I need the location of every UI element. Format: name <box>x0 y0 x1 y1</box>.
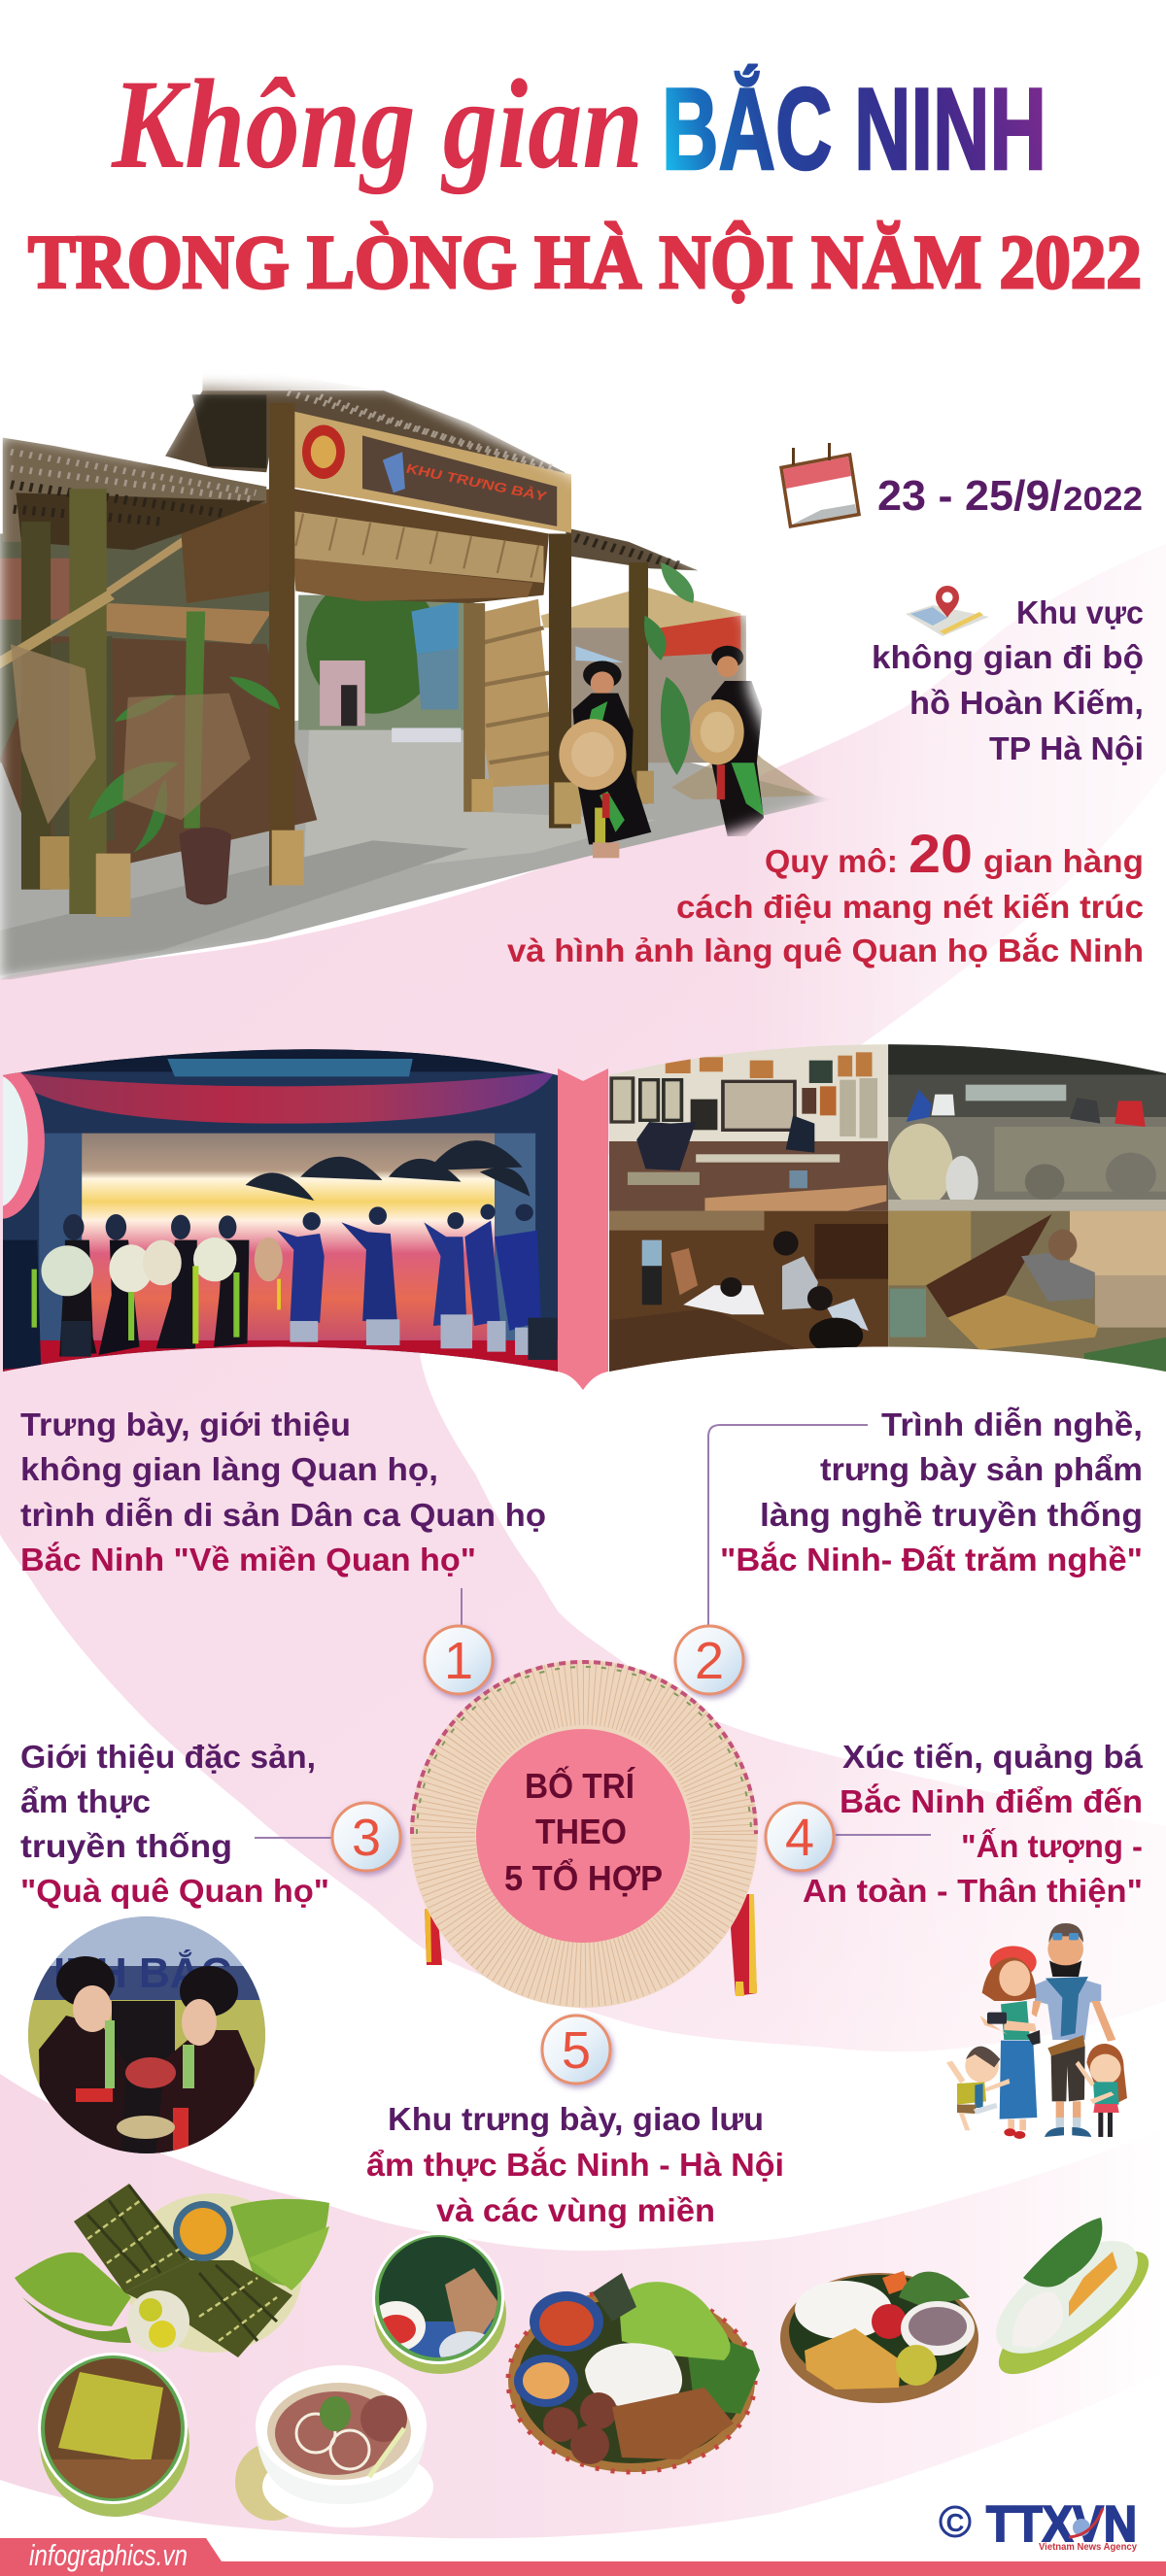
centre circle <box>476 1729 690 1943</box>
photo: quan ho stage performance <box>0 1039 558 1376</box>
mother <box>979 1946 1041 2139</box>
copyright mark: C <box>946 2508 965 2537</box>
text: item 3: "Quà quê Quan họ" <box>20 1873 329 1909</box>
mat weaving <box>888 1211 1166 1373</box>
number badge 4 <box>766 1803 834 1871</box>
title script line: Không gian <box>111 52 643 195</box>
footer bar <box>0 2538 1166 2576</box>
photo: craft villages collage <box>602 1039 1166 1373</box>
number badge 1: 1 <box>444 1632 473 1690</box>
number badge 1 <box>425 1626 493 1694</box>
photo: two women with food <box>28 1916 266 2156</box>
umbrellas <box>246 1140 530 1201</box>
food: fried tofu tray <box>780 2271 978 2403</box>
logo: TTXVN: Vietnam News Agency <box>1039 2542 1137 2553</box>
text: item 5 <box>366 2101 784 2228</box>
gate photo <box>0 362 832 979</box>
number badge 5 <box>542 2016 610 2084</box>
location text <box>872 594 1144 766</box>
scale text <box>507 823 1144 968</box>
number badge 4: 4 <box>785 1809 814 1867</box>
source text: infographics.vn <box>29 2538 188 2572</box>
number badge 2 <box>675 1626 743 1694</box>
scale text: cách điệu mang nét kiến trúc <box>676 889 1144 925</box>
pink background band <box>0 544 1166 2051</box>
father <box>1032 1923 1115 2137</box>
title <box>28 52 1142 304</box>
number badge 5: 5 <box>562 2021 591 2080</box>
food: bun cha tray <box>508 2273 760 2472</box>
location text: không gian đi bộ <box>872 639 1144 675</box>
icon: right tassel <box>731 1894 757 1996</box>
icon: map pin <box>906 586 989 636</box>
book spine <box>558 1068 608 1390</box>
text: item 2 <box>720 1407 1143 1577</box>
thatched roofs <box>3 390 699 570</box>
text: item 1: Bắc Ninh "Về miền Quan họ" <box>20 1542 476 1577</box>
icon: left tassel <box>425 1909 442 1965</box>
bronze ware display <box>888 1039 1166 1211</box>
text: item 4: An toàn - Thân thiện" <box>803 1873 1143 1909</box>
food: banh chung on leaves <box>15 2184 329 2357</box>
centre label: THEO <box>535 1812 627 1851</box>
gate photo: KHU TRƯNG BÀY <box>404 460 550 504</box>
text: item 5: Khu trưng bày, giao lưu <box>388 2101 764 2137</box>
scale text: 20 <box>909 823 973 884</box>
wood carving workshop <box>602 1211 888 1373</box>
text: item 3 <box>20 1739 329 1909</box>
text: item 3: Giới thiệu đặc sản, <box>20 1739 316 1775</box>
food: pho bowl <box>235 2365 433 2527</box>
scale text: gian hàng <box>983 843 1144 879</box>
text: item 5: và các vùng miền <box>436 2192 715 2228</box>
text: item 3: ẩm thực <box>20 1783 151 1819</box>
lower pink background band <box>0 2074 1166 2538</box>
number badge 2: 2 <box>695 1632 724 1690</box>
men performers <box>277 1204 541 1355</box>
centre label <box>504 1765 663 1898</box>
photo: two women with food: INH BẮC <box>53 1949 231 1997</box>
text: item 2: Trình diễn nghề, <box>881 1407 1143 1442</box>
icon: tourist family <box>946 1923 1127 2139</box>
centre label: 5 TỔ HỢP <box>504 1856 663 1898</box>
gallery of paintings <box>602 1039 888 1211</box>
text: item 4: Bắc Ninh điểm đến <box>840 1783 1143 1819</box>
logo: TTXVN: TTXVN <box>986 2496 1137 2553</box>
women performers <box>0 1214 283 1370</box>
scale text: và hình ảnh làng quê Quan họ Bắc Ninh <box>507 932 1144 968</box>
location text: TP Hà Nội <box>989 730 1144 766</box>
date: 23 - 25/9/ <box>877 472 1062 520</box>
centre label: BỐ TRÍ <box>525 1765 635 1806</box>
location text: Khu vực <box>1016 594 1144 630</box>
text: item 1: không gian làng Quan họ, <box>20 1451 438 1487</box>
text: item 2: trưng bày sản phẩm <box>820 1451 1143 1487</box>
event info <box>507 443 1144 968</box>
connector lines <box>255 1425 931 1838</box>
text: item 2: "Bắc Ninh- Đất trăm nghề" <box>720 1542 1143 1577</box>
text: item 4: "Ấn tượng - <box>961 1828 1143 1864</box>
text: item 2: làng nghề truyền thống <box>760 1497 1143 1533</box>
girl <box>1076 2044 1127 2137</box>
woven hat with centre label <box>410 1660 758 2008</box>
number badge 3: 3 <box>352 1809 381 1867</box>
boy <box>946 2047 1010 2130</box>
text: item 1 <box>20 1407 546 1577</box>
food: yellow sticky cake circle <box>38 2353 189 2517</box>
food: rice rolls plate <box>978 2218 1164 2392</box>
scale text: Quy mô: <box>765 843 898 879</box>
copyright mark <box>941 2507 970 2537</box>
text: item 4: Xúc tiến, quảng bá <box>842 1739 1144 1775</box>
text: item 4 <box>803 1739 1144 1909</box>
text: item 3: truyền thống <box>20 1828 232 1864</box>
date: 2022 <box>1063 481 1143 518</box>
text: item 1: trình diễn di sản Dân ca Quan họ <box>20 1497 546 1533</box>
text: item 1: Trưng bày, giới thiệu <box>20 1407 351 1442</box>
location text: hồ Hoàn Kiếm, <box>909 685 1144 721</box>
text: item 5: ẩm thực Bắc Ninh - Hà Nội <box>366 2147 784 2183</box>
icon: calendar <box>779 443 861 528</box>
number badge 3 <box>332 1803 400 1871</box>
food: second circle dish <box>367 2232 506 2374</box>
